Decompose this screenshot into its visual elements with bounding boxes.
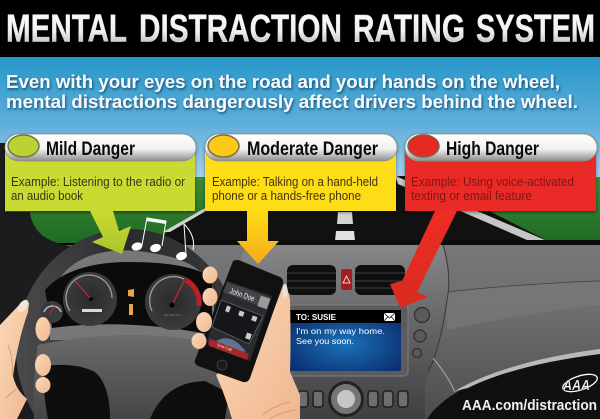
title: DISTRACTION xyxy=(139,8,342,50)
icon: music notes xyxy=(131,218,194,261)
arrow: mild xyxy=(90,211,131,254)
phone screen xyxy=(207,281,272,361)
header band xyxy=(0,0,600,57)
phone body: John Doe xyxy=(228,286,256,303)
speedometer gauge xyxy=(145,274,201,330)
sky background xyxy=(0,57,600,178)
console knobs xyxy=(412,308,430,358)
right hand palm xyxy=(216,284,300,419)
intro text: Even with your eyes on the road and your hands on the wheel, xyxy=(6,72,560,92)
speedometer gauge: 000-000 Ave xyxy=(164,313,181,317)
warning lights xyxy=(128,289,134,315)
left air vent xyxy=(287,265,336,295)
message screen xyxy=(286,305,408,376)
hazard button xyxy=(341,269,352,290)
card: mild danger: Mild Danger xyxy=(46,139,135,160)
card: moderate danger: phone or a hands-free phone xyxy=(212,188,361,203)
scenery: grass and road xyxy=(0,176,600,243)
fingers xyxy=(202,266,218,284)
center console xyxy=(241,245,455,419)
phone body xyxy=(195,260,283,382)
fuel gauge xyxy=(41,301,63,323)
card: mild danger: an audio book xyxy=(11,188,83,203)
card: high danger: Example: Using voice-activated xyxy=(411,174,574,189)
card: moderate danger: Moderate Danger xyxy=(247,139,379,160)
AAA corner badge xyxy=(427,349,600,419)
arrow: moderate xyxy=(237,211,279,264)
card: mild danger xyxy=(5,134,196,211)
spoke openings xyxy=(44,365,110,419)
tachometer gauge xyxy=(63,272,117,326)
indicator: yellow xyxy=(208,135,239,157)
title: RATING xyxy=(353,8,465,50)
arrow: high xyxy=(390,211,457,308)
title: MENTAL xyxy=(6,8,127,50)
dashboard xyxy=(0,240,600,419)
message screen: TO: SUSIE xyxy=(296,313,337,322)
smartphone and right hand xyxy=(192,260,300,419)
steering wheel xyxy=(16,229,240,419)
message screen: See you soon. xyxy=(296,336,354,346)
indicator: green xyxy=(8,135,39,157)
card: high danger: texting or email feature xyxy=(411,188,532,203)
radio controls xyxy=(298,381,408,417)
right air vent xyxy=(355,265,405,295)
left interior: pillar and seat shadow xyxy=(0,143,70,419)
title xyxy=(6,8,595,50)
intro text: mental distractions dangerously affect drivers behind the wheel. xyxy=(6,92,578,112)
card: mild danger: Example: Listening to the radio or xyxy=(11,174,186,189)
AAA logo xyxy=(561,371,599,395)
indicator: red xyxy=(408,135,439,157)
left hand xyxy=(0,298,51,419)
card: moderate danger xyxy=(205,134,397,211)
AAA logo: AAA xyxy=(562,377,590,394)
icon: envelope xyxy=(384,313,395,321)
phone body: End Call xyxy=(217,342,233,352)
intro text xyxy=(6,72,578,112)
card: moderate danger: Example: Talking on a hand-held xyxy=(212,174,378,189)
message screen: I'm on my way home. xyxy=(296,326,385,336)
end call button xyxy=(208,339,249,360)
instrument cluster xyxy=(41,262,212,335)
card: high danger: High Danger xyxy=(446,139,539,160)
card: high danger xyxy=(405,134,597,211)
